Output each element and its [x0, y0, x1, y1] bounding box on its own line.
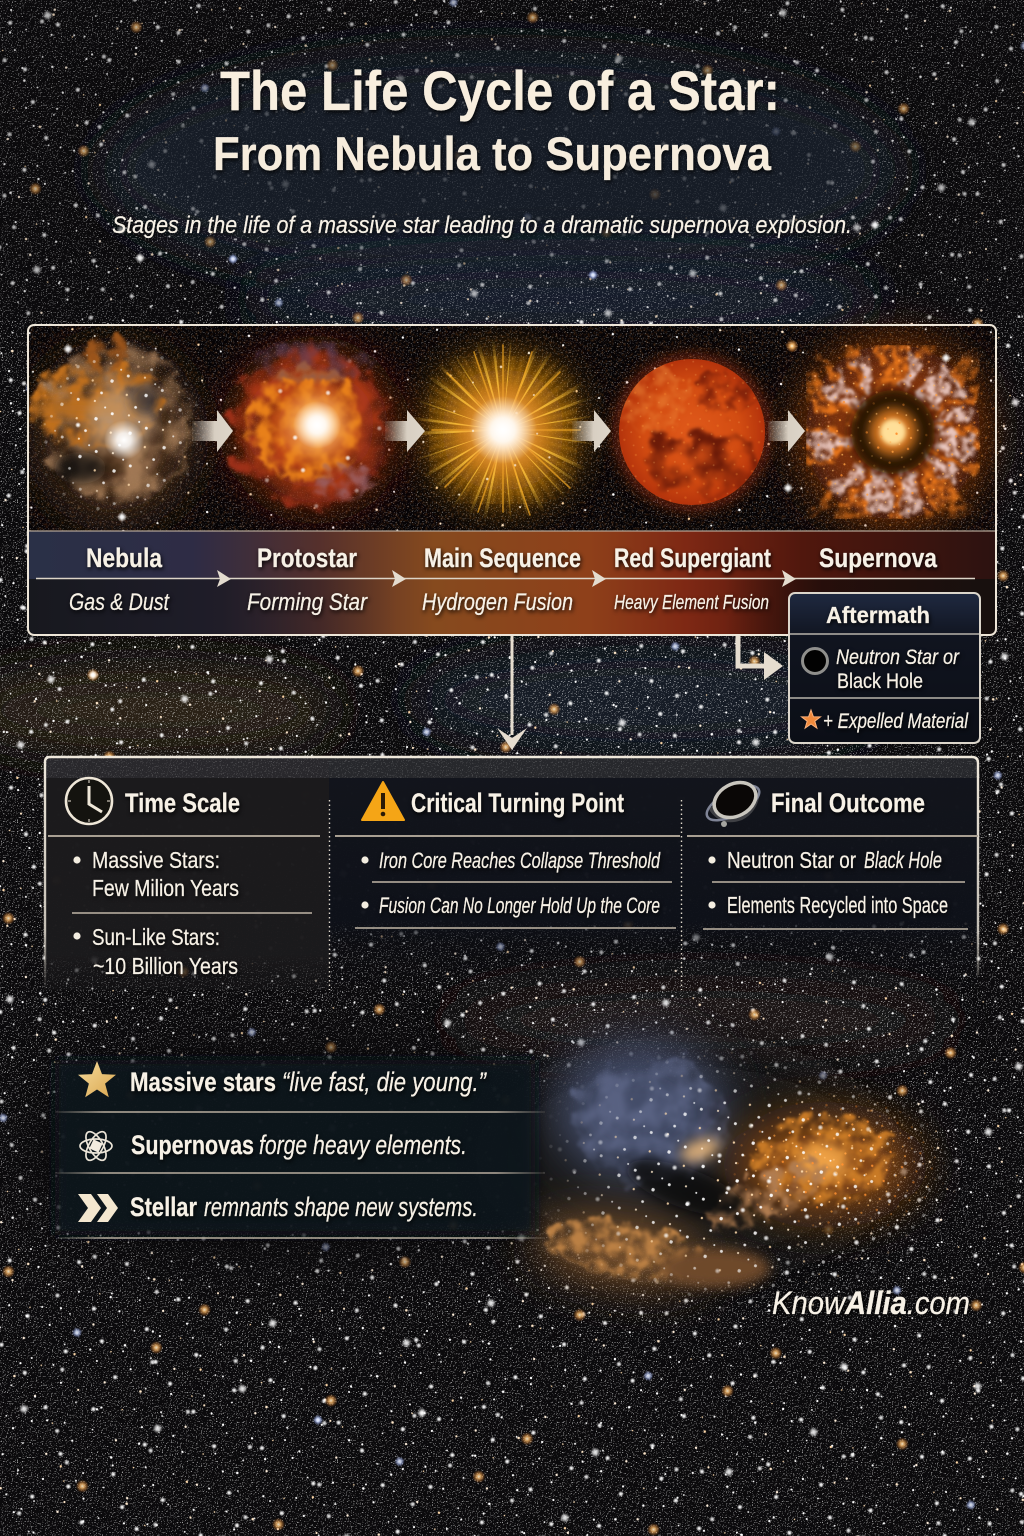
title: From Nebula to Supernova	[213, 127, 772, 180]
icon: atom	[80, 1129, 112, 1163]
panel: star life-cycle stages	[28, 320, 1010, 635]
neutron star or black hole text: Neutron Star or	[836, 646, 960, 669]
details background	[45, 757, 978, 990]
aftermath heading: Aftermath	[826, 602, 930, 628]
stage image: protostar	[225, 340, 405, 530]
icon: gold star	[78, 1061, 116, 1097]
column: critical turning point	[361, 782, 661, 918]
stage descriptions: Heavy Element Fusion	[614, 592, 769, 614]
stage image: main sequence star	[410, 335, 600, 525]
final outcome list	[708, 847, 948, 918]
label band	[28, 530, 996, 634]
stage image: supernova	[775, 320, 1010, 545]
icon: ringed black hole	[702, 776, 764, 827]
stage names: Nebula	[86, 543, 163, 573]
arrow: to aftermath	[738, 636, 783, 680]
stage names: Protostar	[257, 543, 357, 573]
panel: key takeaways	[55, 1060, 545, 1238]
takeaway: remnants	[130, 1192, 478, 1222]
turning point heading: Critical Turning Point	[411, 788, 624, 818]
stage image: red supergiant	[612, 352, 772, 512]
time scale heading: Time Scale	[125, 788, 240, 818]
stage descriptions: Forming Star	[247, 589, 368, 616]
panel: aftermath	[789, 593, 980, 743]
stage descriptions: Hydrogen Fusion	[422, 589, 573, 616]
icon: warning triangle	[362, 782, 404, 820]
icon: black hole	[802, 648, 828, 674]
neutron star or black hole text	[836, 646, 960, 693]
final outcome list: Black Hole	[864, 847, 942, 873]
stage image: nebula	[30, 330, 210, 530]
takeaway: live fast: “live fast, die young.”	[282, 1067, 487, 1097]
stage names	[86, 543, 938, 573]
neutron star or black hole text: Black Hole	[837, 670, 923, 693]
takeaway: heavy elements	[131, 1130, 467, 1160]
deep-space nebula, lower right	[490, 1040, 970, 1320]
time scale list	[73, 847, 239, 979]
takeaway: remnants: Stellar	[130, 1192, 197, 1222]
arrow: down to details	[497, 636, 527, 750]
stage descriptions: Gas & Dust	[69, 589, 170, 616]
takeaway: live fast	[130, 1067, 487, 1097]
column: final outcome	[702, 776, 948, 918]
title: The Life Cycle of a Star:	[220, 59, 780, 122]
subtitle: Stages in the life of a massive star leading to a dramatic supernova explosion.	[112, 212, 852, 239]
expelled material text: + Expelled Material	[823, 710, 969, 733]
image strip background	[28, 326, 996, 531]
final outcome heading: Final Outcome	[771, 788, 925, 818]
time scale list: ~10 Billion Years	[93, 953, 238, 979]
final outcome list: Neutron Star or	[727, 847, 856, 873]
panel: details	[45, 757, 978, 990]
stage names: Supernova	[819, 543, 938, 573]
stage names: Red Supergiant	[614, 543, 771, 573]
turning point list: Fusion Can No Longer Hold Up the Core	[379, 893, 660, 918]
takeaway: heavy elements: Supernovas	[131, 1130, 254, 1160]
icon: clock	[66, 778, 112, 824]
icon: expelled material star	[802, 710, 820, 728]
stage descriptions	[69, 589, 769, 616]
turning point list	[361, 848, 661, 918]
panel border	[28, 325, 996, 635]
time scale list: Massive Stars:	[92, 847, 220, 873]
arrows between stage images	[192, 410, 805, 452]
takeaway: live fast: Massive stars	[130, 1067, 276, 1097]
time scale list: Sun-Like Stars:	[92, 924, 220, 950]
watermark: KnowAllia.com	[772, 1285, 970, 1321]
column: time scale	[66, 778, 240, 979]
timeline line with arrowheads	[36, 570, 975, 587]
turning point list: Iron Core Reaches Collapse Threshold	[379, 848, 661, 873]
icon: chevrons	[78, 1194, 118, 1222]
takeaway: heavy elements: forge heavy elements.	[259, 1130, 467, 1160]
takeaway: remnants: remnants shape new systems.	[204, 1192, 478, 1222]
time scale list: Few Milion Years	[92, 875, 239, 901]
stage names: Main Sequence	[424, 543, 581, 573]
title	[213, 59, 780, 180]
